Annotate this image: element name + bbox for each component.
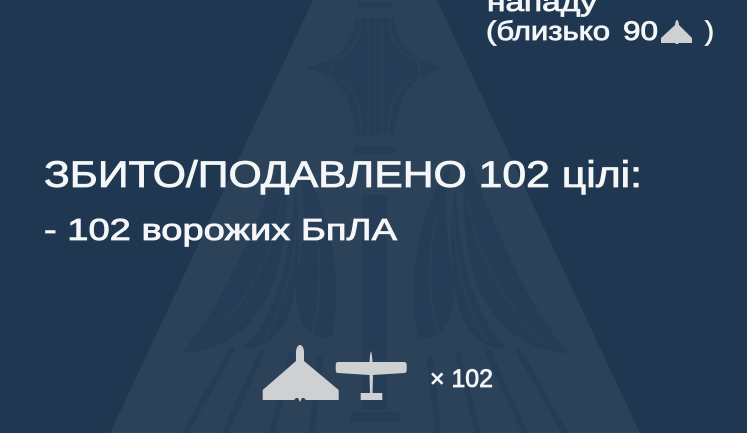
top text block: [486, 0, 714, 46]
icon: delta-wing drone: [263, 345, 339, 402]
heading: shot down total: ЗБИТО/ПОДАВЛЕНО 102 цілі:: [44, 154, 642, 195]
background emblem watermark: [110, 0, 640, 433]
subheading: enemy drones: - 102 ворожих БпЛА: [44, 212, 397, 247]
text: 90: 90: [623, 16, 658, 46]
icon: small drone: [661, 20, 692, 44]
icon: fixed-wing drone: [336, 351, 407, 400]
text: closing parenthesis: ): [705, 16, 714, 46]
text: approximately: (близько: [486, 16, 610, 46]
text: times 102: × 102: [430, 365, 493, 393]
